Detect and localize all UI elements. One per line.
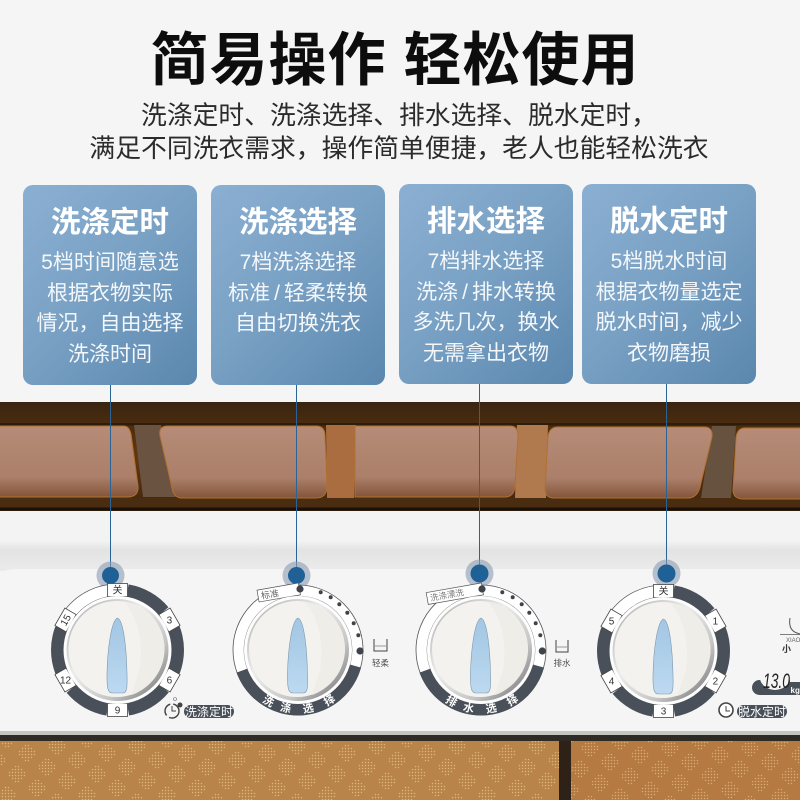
panel: drain selection: 无需拿出衣物 (423, 342, 549, 365)
logo: brand mark: 小 (782, 643, 791, 654)
panel: wash timer (23, 185, 197, 385)
title: 简易操作 轻松使用 (150, 28, 640, 93)
gold front panel right (571, 741, 800, 800)
dial: wash timer: 关 (112, 584, 122, 596)
panel: wash selection: 标准/轻柔转换 (228, 282, 368, 305)
label: spin timer (719, 703, 787, 719)
label: gentle (372, 639, 389, 668)
panel: spin timer (582, 184, 756, 384)
panel: spin timer: 脱水时间，减少 (596, 311, 742, 334)
label: gentle: 轻柔 (372, 658, 389, 668)
panel: wash timer: 根据衣物实际 (47, 282, 173, 305)
panel: wash selection: 洗涤选择 (239, 206, 357, 239)
connector line 4 (666, 384, 668, 573)
dial: wash timer: 9 (115, 706, 121, 716)
label: drain: 排水 (553, 658, 571, 668)
panel: wash selection (211, 185, 385, 385)
dial: wash timer (27, 560, 208, 740)
dial: wash timer: 3 (167, 616, 173, 626)
panel: drain selection: 多洗几次，换水 (412, 311, 560, 334)
panel: drain selection: 洗涤/排水转换 (416, 281, 556, 304)
label: drain (553, 640, 571, 668)
dial: drain selection: 择 (504, 691, 521, 709)
connector line 1 (110, 385, 112, 573)
logo: brand mark (780, 618, 800, 654)
dial: spin timer: 4 (609, 676, 615, 688)
brown top bar (0, 402, 800, 511)
label: wash timer (165, 698, 234, 719)
panel: spin timer: 5档脱水时间 (611, 250, 727, 273)
marker dot 4 (652, 560, 680, 588)
dial: wash selection: 选 (302, 700, 315, 716)
dial: spin timer: 3 (661, 706, 667, 718)
connector line 3 (478, 384, 480, 573)
dial: drain selection: 选 (485, 700, 498, 716)
panel: wash timer: 情况，自由选择 (36, 312, 184, 335)
dial: drain selection: 水 (462, 700, 476, 716)
dial: wash selection: 标准 (260, 587, 280, 601)
label: wash timer: 洗涤定时 (185, 704, 233, 719)
dial: spin timer: 1 (713, 616, 719, 628)
dial: wash timer: 12 (60, 676, 72, 686)
marker dot 3 (466, 560, 494, 588)
subtitle text (89, 102, 709, 163)
panel: wash selection: 自由切换洗衣 (235, 312, 361, 335)
subtitle text: 洗涤定时、洗涤选择、排水选择、脱水定时， (141, 102, 657, 130)
label: spin timer: 脱水定时 (738, 704, 786, 719)
dial: wash selection (225, 577, 371, 723)
control panel body (0, 511, 800, 800)
dial: spin timer: 关 (658, 584, 668, 598)
panel: wash timer: 洗涤时间 (68, 343, 152, 366)
subtitle text: 满足不同洗衣需求，操作简单便捷，老人也能轻松洗衣 (89, 135, 709, 163)
marker dot 1 (96, 562, 124, 590)
panel: drain selection: 排水选择 (427, 205, 545, 238)
panel: wash timer: 洗涤定时 (51, 206, 169, 239)
dial: drain selection: 洗涤漂洗 (429, 587, 465, 603)
dial: wash selection: 洗 (260, 692, 277, 710)
dial: spin timer: 2 (713, 676, 719, 688)
gold front panel left (0, 741, 559, 800)
logo: brand mark: XIAO (786, 638, 800, 644)
panel: spin timer: 脱水定时 (610, 205, 728, 238)
dial: spin timer (573, 561, 754, 741)
panel: wash selection: 7档洗涤选择 (240, 251, 356, 274)
dial: wash timer: 15 (59, 613, 74, 628)
marker dot 2 (282, 562, 310, 590)
panel: spin timer: 根据衣物量选定 (596, 281, 742, 304)
dial: wash selection: 涤 (279, 700, 293, 716)
dial: wash selection: 择 (321, 691, 338, 709)
panel: drain selection: 7档排水选择 (428, 250, 544, 273)
panel: wash timer: 5档时间随意选 (41, 251, 179, 274)
dial: drain selection: 排 (443, 692, 460, 710)
dial: spin timer: 5 (609, 616, 615, 628)
panel: drain selection (399, 184, 573, 384)
connector line 2 (296, 385, 298, 573)
panel: spin timer: 衣物磨损 (627, 342, 711, 365)
badge: 13.0 kg capacity: kg (790, 686, 800, 695)
dial: wash timer: 6 (167, 676, 173, 686)
badge: 13.0 kg capacity (752, 662, 800, 695)
dial: drain selection (408, 577, 554, 723)
